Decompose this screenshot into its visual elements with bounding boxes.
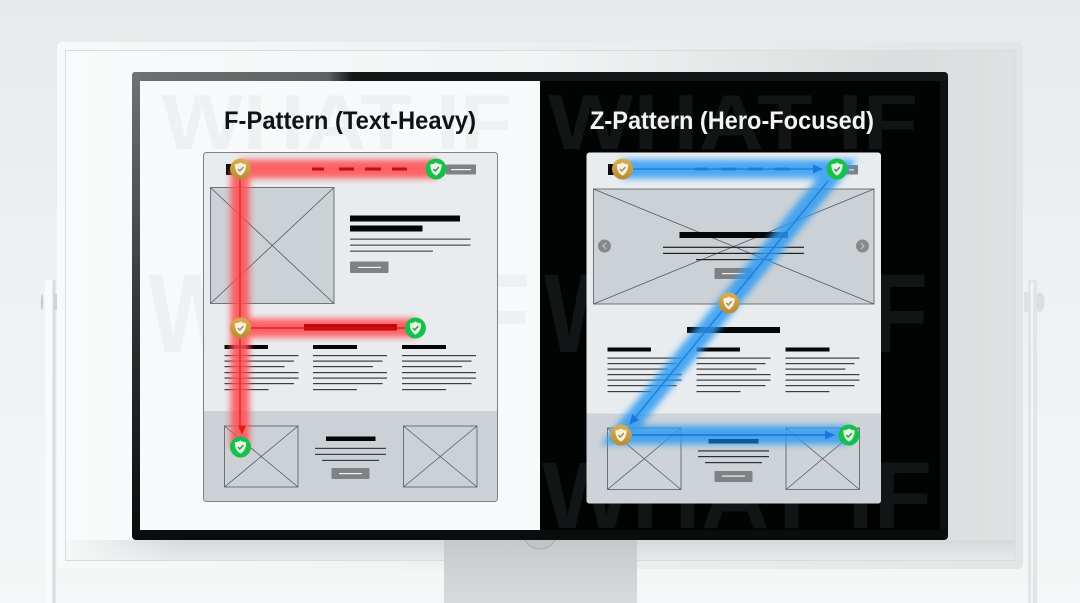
blue Z reading path bbox=[621, 169, 849, 444]
heading: F-Pattern (Text-Heavy) bbox=[224, 107, 476, 135]
badge: gold shield lower left bbox=[610, 424, 632, 446]
stand hinge bbox=[523, 515, 557, 549]
heading: Z-Pattern (Hero-Focused) bbox=[590, 107, 874, 135]
watermark text: WHAT IF bbox=[544, 251, 928, 376]
watermark text bbox=[148, 96, 526, 352]
wireframe page bbox=[586, 152, 881, 504]
shelf behind monitor bbox=[66, 540, 1015, 560]
watermark text bbox=[542, 78, 932, 549]
hero copy bbox=[663, 232, 804, 279]
carousel arrows bbox=[598, 240, 869, 252]
panel: Z-pattern bbox=[542, 78, 932, 549]
hero image placeholder bbox=[210, 188, 334, 304]
watermark text: WHAT IF bbox=[548, 78, 918, 166]
red F reading path bbox=[240, 169, 437, 447]
three text columns bbox=[608, 348, 860, 392]
wireframe page bbox=[204, 152, 498, 502]
panel: F-pattern bbox=[140, 78, 540, 530]
hero placeholder bbox=[594, 189, 874, 304]
monitor body bbox=[132, 72, 948, 540]
left screen background bbox=[140, 81, 540, 530]
watermark text: WHAT IF bbox=[162, 78, 512, 166]
badge: green shield top bbox=[426, 158, 446, 180]
logo mark bbox=[226, 164, 232, 175]
badge: green shield bottom bbox=[230, 436, 251, 458]
monitor stand bbox=[444, 538, 637, 603]
badge: green shield lower right bbox=[838, 424, 860, 446]
three text columns bbox=[224, 345, 476, 390]
badge: gold shield centre bbox=[718, 292, 740, 314]
badge: green shield middle bbox=[405, 318, 426, 338]
nav button bbox=[446, 164, 476, 174]
badge: gold shield middle bbox=[230, 318, 251, 338]
badge: green shield top right bbox=[826, 158, 848, 180]
section heading bar bbox=[687, 327, 780, 333]
footer images bbox=[224, 426, 477, 487]
left support post bbox=[41, 280, 58, 603]
footer copy bbox=[315, 436, 386, 479]
watermark text: WHAT IF bbox=[148, 251, 530, 376]
badge: gold shield start bbox=[612, 158, 633, 180]
watermark text: WHAT IF bbox=[542, 443, 932, 549]
hero copy bbox=[350, 216, 470, 273]
logo mark bbox=[608, 164, 614, 175]
right support post bbox=[1024, 280, 1044, 603]
outer glass frame bbox=[57, 42, 1023, 569]
footer copy bbox=[698, 450, 769, 482]
badge: gold shield top bbox=[230, 158, 251, 180]
nav button bbox=[842, 165, 858, 174]
footer images bbox=[608, 428, 860, 490]
